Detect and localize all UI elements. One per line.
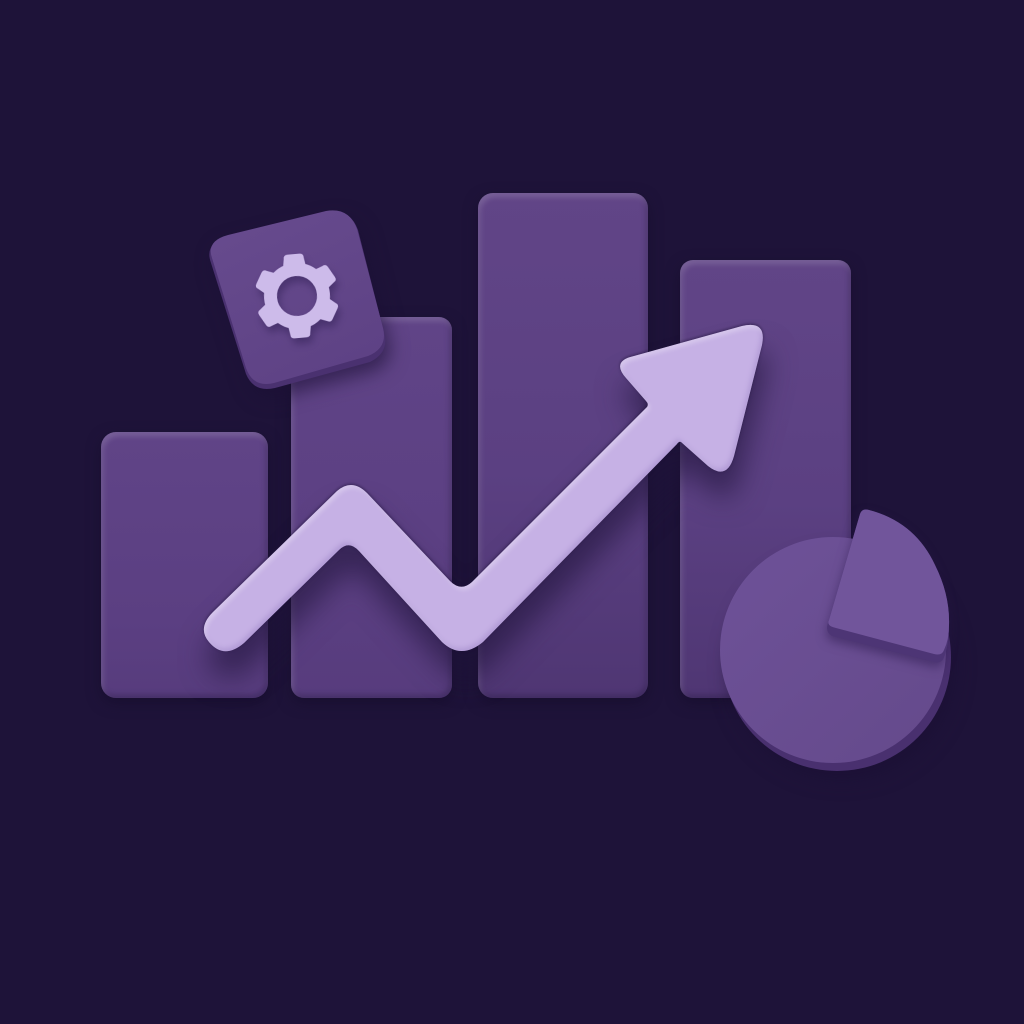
pie body — [720, 537, 946, 763]
pie edge — [723, 543, 951, 771]
slice edge — [827, 510, 949, 662]
gear tile — [209, 210, 385, 389]
bar 4 — [680, 260, 851, 698]
bar 2 — [291, 317, 452, 698]
icon: gear — [251, 250, 343, 342]
pie slice — [827, 510, 949, 662]
tile face — [211, 210, 384, 384]
bar 3 — [478, 193, 648, 698]
pie chart — [720, 510, 951, 771]
bar 1 — [101, 432, 268, 698]
tile edge — [209, 211, 385, 389]
arrow — [204, 325, 763, 651]
slice face — [828, 510, 949, 654]
